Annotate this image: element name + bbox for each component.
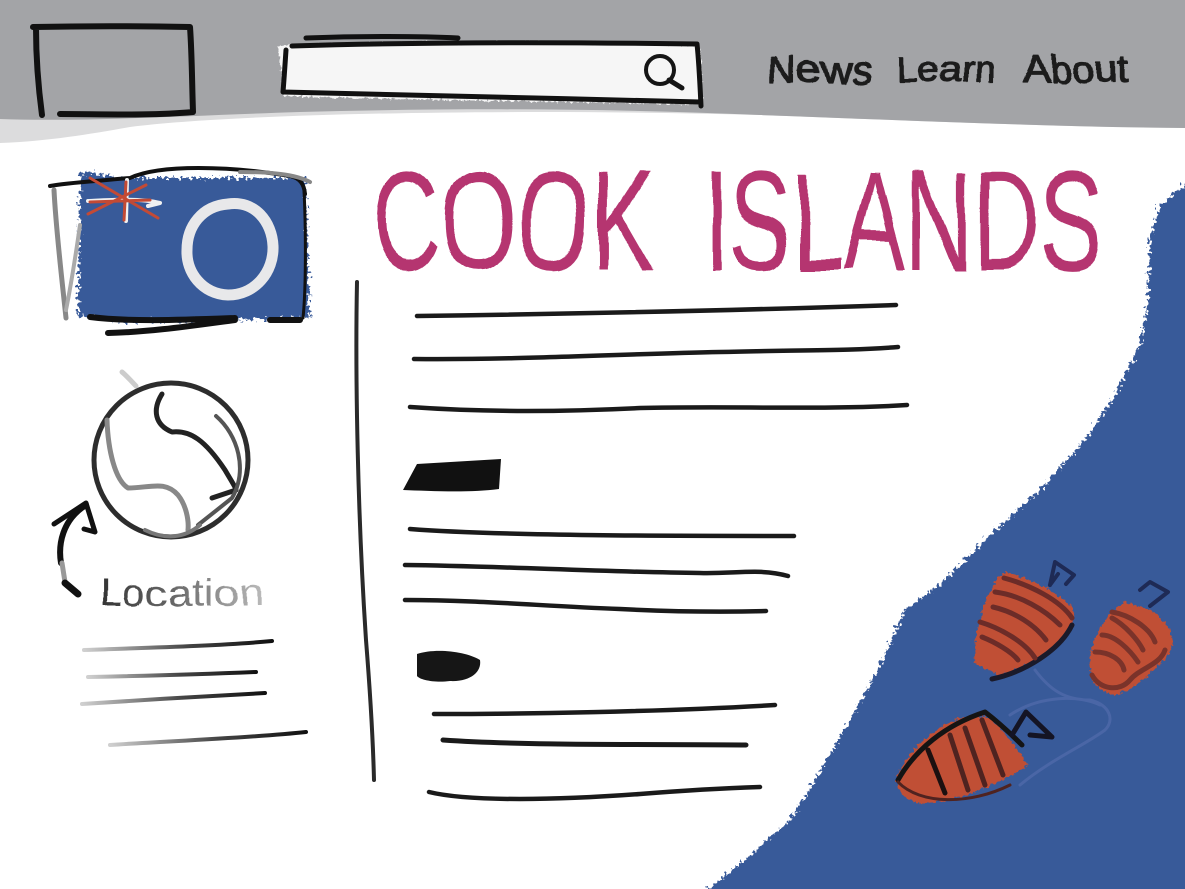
flag union emblem — [88, 178, 160, 221]
main text lines: paragraph three — [429, 705, 775, 799]
header bar — [0, 0, 1185, 143]
carrots — [897, 562, 1173, 803]
vertical divider — [356, 282, 374, 780]
carrot outline ghost — [1010, 670, 1110, 785]
subheading block two — [417, 651, 480, 682]
logo placeholder — [33, 26, 193, 115]
navigation links — [768, 49, 1127, 92]
main text lines: paragraph one — [410, 305, 907, 411]
globe — [94, 372, 248, 537]
nav: News: News — [768, 50, 871, 92]
nav: About: About — [1022, 49, 1127, 91]
icon: magnifying glass — [646, 56, 682, 88]
search box — [278, 36, 703, 106]
arrow — [54, 503, 95, 594]
carrot right — [1090, 582, 1173, 695]
nav: Learn: Learn — [897, 50, 995, 92]
main text lines: paragraph two — [405, 529, 794, 612]
subheading block one — [403, 459, 501, 491]
location label: Location — [98, 573, 263, 614]
carrot bottom — [897, 712, 1052, 803]
carrot top — [975, 562, 1075, 679]
flag ring — [187, 204, 273, 295]
blue corner shape — [700, 176, 1185, 889]
title: COOK — [372, 142, 654, 301]
sidebar text lines — [82, 641, 306, 745]
flag — [50, 168, 310, 333]
